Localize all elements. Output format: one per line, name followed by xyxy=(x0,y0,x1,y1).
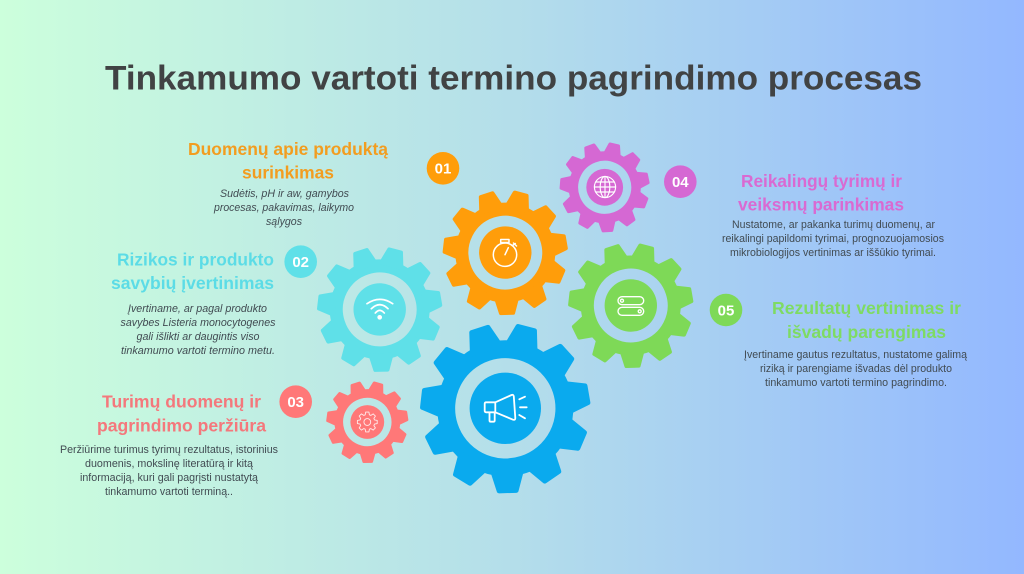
icon: wifi xyxy=(367,299,393,319)
text 01: procesas, pakavimas, laikymo xyxy=(213,202,354,214)
icon: globe xyxy=(594,176,616,198)
text 05: Įvertiname gautus rezultatus, nustatome galimą xyxy=(744,349,968,361)
text 02: gali išlikti ar daugintis viso xyxy=(136,331,260,343)
text 04: reikalingi papildomi tyrimai, prognozuojamosios xyxy=(722,233,944,245)
text 02 xyxy=(120,303,276,357)
badge 03: 03 xyxy=(287,394,304,411)
badge 02: 02 xyxy=(292,254,309,271)
heading 02: Rizikos ir produkto xyxy=(117,250,274,270)
text 03 xyxy=(60,444,278,498)
heading 02: savybių įvertinimas xyxy=(111,273,274,293)
text 01: Sudėtis, pH ir aw, gamybos xyxy=(220,188,349,200)
badge 04: 04 xyxy=(672,174,689,191)
icon: toggles xyxy=(618,297,644,315)
gear 03: red cog xyxy=(316,371,419,474)
heading 04: Reikalingų tyrimų ir xyxy=(741,171,902,191)
title: Tinkamumo vartoti termino pagrindimo procesas xyxy=(105,60,922,98)
icon: megaphone xyxy=(485,395,527,422)
icon: cog xyxy=(357,412,377,432)
text 05 xyxy=(744,349,968,389)
heading 03: Turimų duomenų ir xyxy=(102,392,261,412)
text 02: tinkamumo vartoti termino metu. xyxy=(121,345,275,357)
text 03: informaciją, kuri gali pagrįsti nustatytą xyxy=(80,472,259,484)
text 03: tinkamumo vartoti terminą.. xyxy=(105,486,233,498)
text 03: duomenis, mokslinę literatūrą ir kitą xyxy=(85,458,254,470)
text 03: Peržiūrime turimus tyrimų rezultatus, istorinius xyxy=(60,444,278,456)
step 03 xyxy=(60,385,312,498)
text 04 xyxy=(722,219,944,259)
badge 04 xyxy=(664,165,697,198)
gear 05: green toggles xyxy=(551,227,711,385)
heading 01: surinkimas xyxy=(242,162,334,182)
step 05 xyxy=(710,294,968,389)
gear 02: cyan wifi xyxy=(300,230,459,389)
text 05: riziką ir parengiame išvadas dėl produkto xyxy=(760,363,952,375)
heading 05 xyxy=(772,298,961,342)
heading 05: Rezultatų vertinimas ir xyxy=(772,298,961,318)
text 02: Įvertiname, ar pagal produkto xyxy=(127,303,267,315)
badge 01 xyxy=(427,152,459,185)
badge 03 xyxy=(279,385,312,418)
text 02: savybes Listeria monocytogenes xyxy=(120,317,276,329)
badge 05: 05 xyxy=(718,302,734,319)
heading 04: veiksmų parinkimas xyxy=(738,194,904,214)
badge 02 xyxy=(284,245,317,278)
heading 04 xyxy=(738,171,904,214)
text 04: mikrobiologijos vertinimas ar iššūkio tyrimai. xyxy=(730,247,936,259)
text 01 xyxy=(213,188,354,228)
text 05: tinkamumo vartoti termino pagrindimo. xyxy=(765,377,947,389)
icon: stopwatch xyxy=(493,240,517,266)
gear 04: magenta globe xyxy=(546,129,663,246)
heading 02 xyxy=(111,250,274,293)
text 04: Nustatome, ar pakanka turimų duomenų, ar xyxy=(732,219,935,231)
gear 01: orange stopwatch xyxy=(426,174,585,332)
gear center: blue megaphone xyxy=(397,301,614,517)
step 04 xyxy=(664,165,944,259)
step 02 xyxy=(111,245,317,357)
heading 01 xyxy=(188,139,388,182)
heading 03: pagrindimo peržiūra xyxy=(97,416,266,436)
badge 05 xyxy=(710,294,742,326)
heading 01: Duomenų apie produktą xyxy=(188,139,388,159)
text 01: sąlygos xyxy=(266,216,302,228)
step 01 xyxy=(188,139,459,228)
badge 01: 01 xyxy=(435,160,451,178)
heading 03 xyxy=(97,392,266,436)
heading 05: išvadų parengimas xyxy=(787,322,946,342)
